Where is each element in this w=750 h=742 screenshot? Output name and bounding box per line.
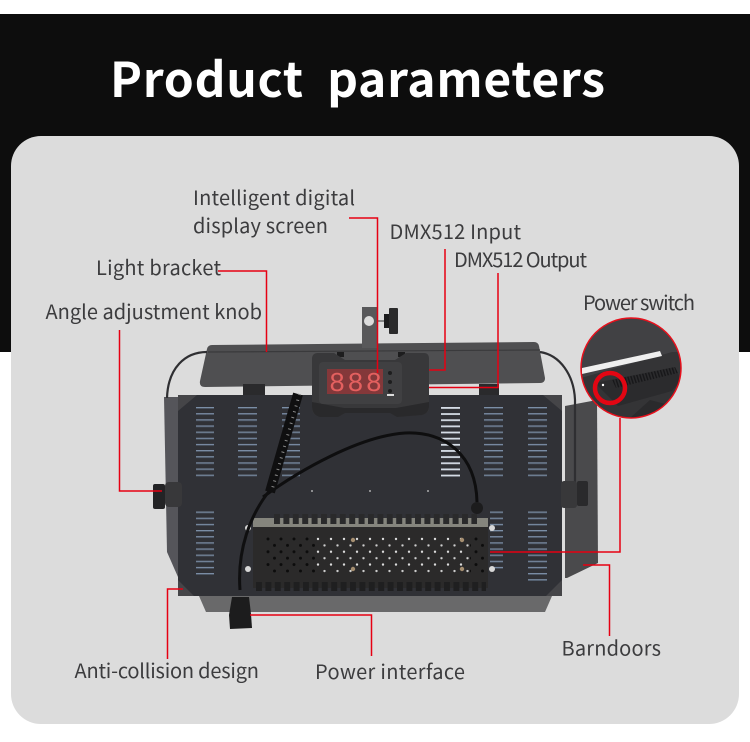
mounting bracket with knob [362, 307, 398, 348]
back plate [178, 395, 562, 596]
label: intelligent digital display screen [193, 182, 355, 239]
cable gland [471, 502, 483, 514]
power supply box [245, 514, 495, 591]
ventilation slots [196, 407, 547, 581]
left barndoor [164, 397, 178, 577]
label: light bracket: Light bracket [96, 252, 221, 281]
black power cable [263, 433, 477, 502]
right barndoor [565, 400, 598, 578]
corner guards [178, 395, 562, 596]
power plug [229, 597, 252, 629]
product: LED panel light [153, 307, 598, 629]
digital display unit: 888 [329, 370, 382, 400]
top barndoor [200, 342, 545, 387]
left knob [153, 482, 182, 509]
title: Product parameters [110, 41, 605, 111]
yoke arms [167, 352, 575, 485]
leader lines [120, 218, 620, 659]
coiled cable [240, 394, 300, 590]
digital display unit [312, 352, 429, 417]
right knob [561, 481, 588, 508]
barndoor ridge [208, 350, 540, 352]
inset: power switch close-up [581, 318, 685, 420]
grey panel [11, 136, 739, 724]
bottom barndoor [199, 596, 552, 612]
label: barndoors: Barndoors [562, 632, 661, 662]
plate screws [311, 490, 429, 492]
hinges [243, 384, 499, 396]
label: DMX512 output: DMX512 Output [454, 244, 587, 273]
label: angle adjustment knob: Angle adjustment knob [46, 296, 262, 325]
black header band [0, 14, 750, 352]
label: power interface: Power interface [315, 656, 465, 685]
label: intelligent digital display screen: Intelligent digital [193, 182, 355, 211]
label: anti-collision design: Anti-collision design [74, 655, 259, 684]
label: DMX512 input: DMX512 Input [390, 216, 521, 245]
label: power switch: Power switch [583, 287, 695, 316]
label: intelligent digital display screen: display screen [193, 210, 328, 239]
